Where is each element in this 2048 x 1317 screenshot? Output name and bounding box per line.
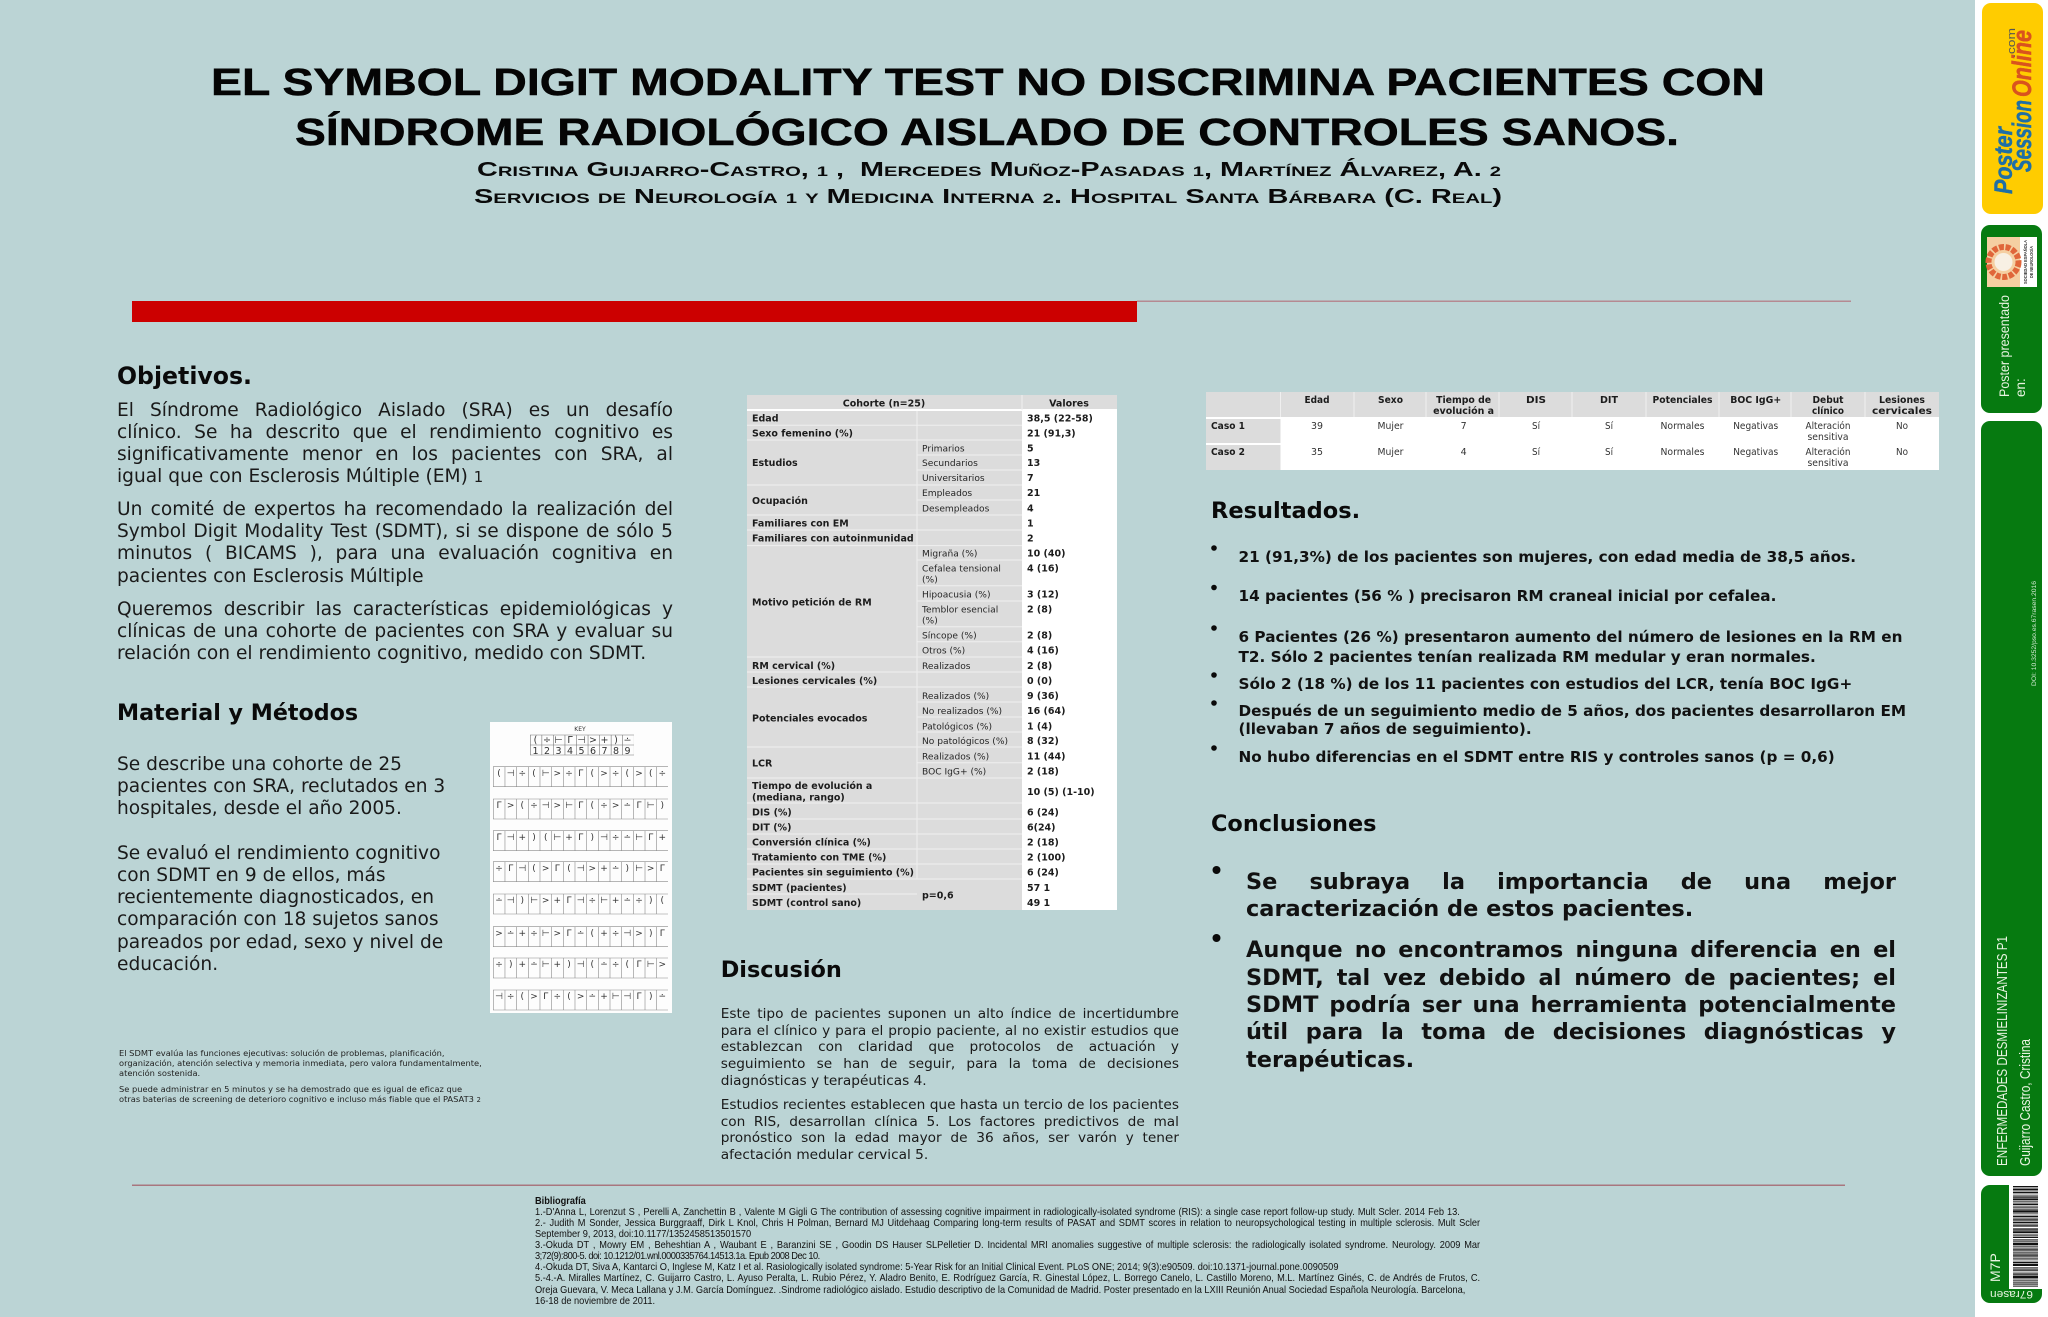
text block: resultados: No hubo diferencias en el SDMT entre RIS y controles sanos (p = 0,6) bbox=[1238, 748, 1835, 766]
table: case series: Negativas bbox=[1733, 421, 1778, 432]
table: cohort characteristics: 3 (12) bbox=[1027, 589, 1059, 600]
sidebar: poster code and barcode bbox=[1981, 1185, 2043, 1303]
authors and affiliations bbox=[474, 158, 1502, 208]
text block: resultados: T2. Sólo 2 pacientes tenían realizada RM medular y eran normales. bbox=[1238, 648, 1816, 666]
text block: discusión: afectación medular cervical 5. bbox=[721, 1147, 928, 1163]
table: case series: Potenciales bbox=[1652, 395, 1713, 406]
text block: SDMT footnote: otras baterias de screening de deterioro cognitivo e incluso más fiable que el PASAT3 2 bbox=[119, 1094, 481, 1104]
text block: bibliografía: 3;72(9):800-5. doi: 10.1212/01.wnl.0000335764.14513.1a. Epub 2008 Dec 10. bbox=[535, 1250, 820, 1262]
text block: conclusiones: Aunque no encontramos ninguna diferencia en el bbox=[1246, 937, 1896, 963]
table: case series: No bbox=[1896, 421, 1908, 432]
table: case series: Mujer bbox=[1378, 447, 1404, 458]
footer rule bbox=[132, 1184, 1845, 1186]
sidebar: session and author: ENFERMEDADES DESMIELINIZANTES P1 bbox=[1994, 936, 2011, 1166]
sidebar: PosterSessionOnline logo: .com bbox=[2006, 28, 2018, 58]
table: case series: 4 bbox=[1461, 447, 1467, 458]
text block: conclusiones: útil para la toma de decisiones diagnósticas y bbox=[1246, 1019, 1896, 1045]
sidebar: session and author bbox=[1981, 421, 2042, 1176]
bullets: results bbox=[1211, 545, 1217, 751]
figure: SDMT test sheet: ÷Γ⊣(>Γ(⊣>+∸)⊢>Γ bbox=[495, 864, 665, 874]
sidebar: poster presented at: DE NEUROLOGÍA bbox=[2027, 245, 2034, 278]
text block: discusión: con RIS, desarrollan clínica 5. Los factores predictivos de mal bbox=[721, 1114, 1179, 1130]
table: cohort characteristics: (%) bbox=[922, 576, 938, 586]
table: cohort characteristics: 7 bbox=[1027, 473, 1034, 484]
table: case series: Debut bbox=[1812, 395, 1844, 406]
table: cohort characteristics: Primarios bbox=[922, 444, 965, 454]
table: cohort characteristics: 2 (8) bbox=[1027, 604, 1052, 615]
text block: objetivos: El Síndrome Radiológico Aislado (SRA) es un desafío bbox=[117, 400, 673, 421]
table: cohort characteristics: Valores bbox=[1049, 399, 1089, 410]
text block: conclusiones: Se subraya la importancia de una mejor bbox=[1246, 869, 1896, 895]
table: cohort characteristics: No patológicos (%) bbox=[922, 736, 1008, 747]
table: cohort characteristics: Desempleados bbox=[922, 504, 990, 514]
sidebar: PosterSessionOnline logo bbox=[1982, 3, 2043, 214]
text block: conclusiones: SDMT podría ser una herramienta potencialmente bbox=[1246, 992, 1896, 1018]
text block: resultados: Sólo 2 (18 %) de los 11 pacientes con estudios del LCR, tenía BOC IgG+ bbox=[1238, 675, 1852, 693]
text block: bibliografía: 2.- Judith M Sonder, Jessica Burggraaff, Dirk L Knol, Chris H Polman, Bernard MJ Uitdehaag Comparing long-term results of PASAT and SDMT scores in relation to neuropsychological testing in multiple sclerosis. Mult Scler bbox=[535, 1217, 1480, 1229]
text block: objetivos: Queremos describir las características epidemiológicas y bbox=[117, 599, 673, 620]
table: case series: BOC IgG+ bbox=[1730, 395, 1781, 406]
figure: SDMT test sheet: ÷)+∸⊢+)⊣(∸÷(Γ⊢> bbox=[495, 960, 666, 970]
table: cohort characteristics: Estudios bbox=[752, 458, 798, 469]
table: cohort characteristics: Conversión clínica (%) bbox=[752, 838, 871, 849]
text block: bibliografía: 4.-Okuda DT, Siva A, Kantarci O, Inglese M, Katz I et al. Rasiologically isolated syndrome: 5-Year Risk for an Initial Clinical Event. PLoS ONE; 2014; 9(3):e90509. doi:10.1371-journal.pone.0090509 bbox=[535, 1261, 1338, 1273]
table: cohort characteristics: 2 bbox=[1027, 533, 1034, 544]
table: cohort characteristics: 16 (64) bbox=[1027, 706, 1065, 717]
text block: objetivos: significativamente menor en los pacientes con SRA, al bbox=[117, 444, 673, 465]
table: cohort characteristics: 6 (24) bbox=[1027, 808, 1059, 819]
text block: discusión: seguimiento se han de seguir, para la toma de decisiones bbox=[721, 1056, 1179, 1072]
table: case series: 35 bbox=[1311, 447, 1323, 458]
table: cohort characteristics: No realizados (%) bbox=[922, 707, 1002, 717]
table: cohort characteristics: DIT (%) bbox=[752, 823, 791, 834]
table: case series: 7 bbox=[1461, 421, 1467, 432]
text block: bibliografía: 5.-4.-A. Miralles Martínez, C. Guijarro Castro, L. Ayuso Peralta, L. Rubio Pérez, Y. Aladro Benito, E. Rodríguez García, R. Ginestal López, L. Borrego Canelo, L. Castillo Moreno, M.L. Martínez Ginés, C. de Andrés de Frutos, C. bbox=[535, 1272, 1480, 1284]
text block: objetivos: minutos ( BICAMS ), para una evaluación cognitiva en bbox=[117, 543, 673, 564]
text block: SDMT footnote: Se puede administrar en 5 minutos y se ha demostrado que es igual de eficaz que bbox=[119, 1084, 462, 1094]
sidebar: poster presented at: SOCIEDAD ESPAÑOLA bbox=[2022, 239, 2028, 284]
text block: objetivos: clínicas de una cohorte de pacientes con SRA y evaluar su bbox=[117, 621, 673, 642]
figure: SDMT test sheet: >∸+÷⊢>Γ∸(+÷⊣>)Γ bbox=[495, 929, 665, 939]
table: cohort characteristics: Motivo petición de RM bbox=[752, 597, 872, 608]
table: case series: Sí bbox=[1605, 447, 1613, 458]
sidebar: session and author: DOI: 10.3252/pso.es.67rasen.2016 bbox=[2031, 581, 2038, 686]
title: EL SYMBOL DIGIT MODALITY TEST NO DISCRIMINA PACIENTES CON bbox=[211, 62, 1765, 104]
heading: Resultados: Resultados. bbox=[1211, 498, 1360, 524]
text block: SDMT footnote: organización, atención selectiva y memoria inmediata, pero valora fundamentalmente, bbox=[119, 1058, 482, 1068]
table: cohort characteristics: Universitarios bbox=[922, 474, 985, 484]
heading: Material y Métodos: Material y Métodos bbox=[117, 700, 358, 726]
text block: conclusiones: caracterización de estos pacientes. bbox=[1246, 896, 1693, 922]
table: cohort characteristics: Potenciales evocados bbox=[752, 713, 868, 724]
table: case series bbox=[1206, 392, 1939, 470]
table: case series: Alteración bbox=[1806, 447, 1850, 458]
table: case series: sensitiva bbox=[1808, 458, 1848, 469]
table: cohort characteristics: 9 (36) bbox=[1027, 691, 1059, 702]
table: cohort characteristics: 13 bbox=[1027, 458, 1040, 469]
table: cohort characteristics: 38,5 (22-58) bbox=[1027, 413, 1093, 424]
table: cohort characteristics: Hipoacusia (%) bbox=[922, 590, 991, 600]
table: cohort characteristics: (mediana, rango) bbox=[752, 793, 845, 804]
table: cohort characteristics: Migraña (%) bbox=[922, 550, 977, 560]
table: cohort characteristics: Familiares con autoinmunidad bbox=[752, 533, 914, 544]
text block: métodos: educación. bbox=[117, 954, 218, 975]
table: case series: Normales bbox=[1660, 447, 1705, 458]
text block: resultados: (llevaban 7 años de seguimiento). bbox=[1238, 720, 1532, 738]
table: cohort characteristics: 21 (91,3) bbox=[1027, 429, 1076, 440]
text block: resultados: 14 pacientes (56 % ) precisaron RM craneal inicial por cefalea. bbox=[1238, 587, 1776, 605]
table: case series: Caso 2 bbox=[1211, 447, 1245, 458]
table: cohort characteristics: 4 bbox=[1027, 503, 1034, 514]
sidebar: PosterSessionOnline logo: Session bbox=[2007, 100, 2037, 172]
text block: métodos: con SDMT en 9 de ellos, más bbox=[117, 865, 386, 886]
table: cohort characteristics: Realizados bbox=[922, 662, 971, 672]
table: cohort characteristics: (%) bbox=[922, 616, 938, 626]
text block: discusión bbox=[721, 1006, 1179, 1163]
sidebar: poster code and barcode: 67rasen bbox=[1990, 1288, 2033, 1300]
text block: bibliografía bbox=[535, 1195, 1480, 1307]
table: cohort characteristics: 4 (16) bbox=[1027, 645, 1059, 656]
text block: objetivos: clínico. Se ha descrito que el rendimiento cognitivo es bbox=[117, 422, 673, 443]
table: cohort characteristics: Secundarios bbox=[922, 459, 978, 469]
table: cohort characteristics: Realizados (%) bbox=[922, 752, 989, 762]
table: cohort characteristics: Lesiones cervicales (%) bbox=[752, 676, 877, 687]
figure: SDMT test sheet: ⊣÷(>Γ÷(>∸+⊢⊣Γ)∸ bbox=[495, 992, 666, 1002]
text block: resultados bbox=[1238, 548, 1906, 766]
table: case series: sensitiva bbox=[1808, 432, 1848, 443]
table: cohort characteristics: 8 (32) bbox=[1027, 736, 1059, 747]
table: cohort characteristics: Cefalea tensional bbox=[922, 565, 1001, 575]
table: cohort characteristics: 4 (16) bbox=[1027, 564, 1059, 575]
table: case series: clínico bbox=[1812, 405, 1844, 417]
table: cohort characteristics: Realizados (%) bbox=[922, 692, 989, 702]
text block: resultados: Después de un seguimiento medio de 5 años, dos pacientes desarrollaron EM bbox=[1238, 702, 1906, 720]
text block: conclusiones: terapéuticas. bbox=[1246, 1047, 1414, 1073]
sidebar: PosterSessionOnline logo: Online bbox=[2007, 30, 2037, 97]
text block: métodos: hospitales, desde el año 2005. bbox=[117, 798, 402, 819]
sidebar: session and author: Guijarro Castro, Cristina bbox=[2017, 1038, 2034, 1166]
table: cohort characteristics: BOC IgG+ (%) bbox=[922, 767, 986, 777]
table: cohort characteristics: 6(24) bbox=[1027, 823, 1056, 834]
table: cohort characteristics: 0 (0) bbox=[1027, 676, 1052, 687]
figure: SDMT test sheet: 123456789 bbox=[532, 746, 631, 757]
heading: Objetivos: Objetivos. bbox=[117, 362, 252, 390]
table: cohort characteristics: 5 bbox=[1027, 443, 1034, 454]
bullets: conclusions bbox=[1212, 866, 1220, 942]
text block: SDMT footnote: El SDMT evalúa las funciones ejecutivas: solución de problemas, planificación, bbox=[119, 1048, 445, 1058]
table: cohort characteristics: Sexo femenino (%) bbox=[752, 429, 853, 440]
sidebar: PosterSessionOnline logo: Poster bbox=[1990, 126, 2018, 194]
text block: bibliografía: Bibliografía bbox=[535, 1195, 586, 1207]
table: case series: cervicales bbox=[1872, 406, 1932, 417]
text block: métodos: pareados por edad, sexo y nivel de bbox=[117, 932, 443, 953]
text block: métodos: Se describe una cohorte de 25 bbox=[117, 754, 402, 775]
table: case series: 39 bbox=[1311, 421, 1323, 432]
table: cohort characteristics: Familiares con EM bbox=[752, 519, 849, 530]
text block: bibliografía: 3.-Okuda DT , Mowry EM , Beheshtian A , Waubant E , Baranzini SE , Goodin DS Hauser SLPelletier D. Incidental MRI anomalies suggestive of multiple sclerosis: the radiologically isolated syndrome. Neurology. 2009 Mar bbox=[535, 1239, 1480, 1251]
sidebar: poster presented at: Poster presentado bbox=[1997, 295, 2012, 397]
table: cohort characteristics: 10 (5) (1-10) bbox=[1027, 787, 1095, 798]
text block: discusión: establezcan con claridad que protocolos de actuación y bbox=[721, 1039, 1179, 1055]
table: cohort characteristics: 57 1 bbox=[1027, 883, 1050, 894]
text block: bibliografía: September 9, 2013, doi:10.1177/1352458513501570 bbox=[535, 1228, 751, 1240]
table: case series: Sí bbox=[1532, 421, 1540, 432]
table: cohort characteristics: 10 (40) bbox=[1027, 549, 1065, 560]
text block: SDMT footnote bbox=[119, 1048, 482, 1104]
table: cohort characteristics: Patológicos (%) bbox=[922, 721, 992, 732]
text block: SDMT footnote: atención sostenida. bbox=[119, 1068, 200, 1078]
text block: resultados: 21 (91,3%) de los pacientes son mujeres, con edad media de 38,5 años. bbox=[1238, 548, 1856, 566]
table: cohort characteristics: Tiempo de evolución a bbox=[752, 781, 872, 792]
table: case series: Normales bbox=[1660, 421, 1705, 432]
table: cohort characteristics: LCR bbox=[752, 759, 773, 770]
text block: discusión: Este tipo de pacientes suponen un alto índice de incertidumbre bbox=[721, 1006, 1179, 1022]
table: cohort characteristics: 2 (100) bbox=[1027, 853, 1065, 864]
text block: objetivos: Symbol Digit Modality Test (SDMT), si se dispone de sólo 5 bbox=[117, 521, 673, 542]
table: cohort characteristics: Ocupación bbox=[752, 496, 808, 507]
text block: objetivos: relación con el rendimiento cognitivo, medido con SDMT. bbox=[117, 643, 646, 664]
title bbox=[211, 62, 1765, 154]
text block: discusión: diagnósticas y terapéuticas 4. bbox=[721, 1073, 927, 1089]
table: case series: No bbox=[1896, 447, 1908, 458]
figure: SDMT test sheet bbox=[490, 722, 672, 1013]
heading: Discusión: Discusión bbox=[721, 957, 842, 983]
text block: bibliografía: 16-18 de noviembre de 2011. bbox=[535, 1295, 655, 1307]
table: case series: Lesiones bbox=[1879, 395, 1925, 406]
text block: métodos: pacientes con SRA, reclutados en 3 bbox=[117, 776, 445, 797]
table: case series: Sí bbox=[1605, 421, 1613, 432]
text block: objetivos bbox=[117, 400, 673, 664]
text block: métodos: comparación con 18 sujetos sanos bbox=[117, 909, 439, 930]
text block: objetivos: Un comité de expertos ha recomendado la realización del bbox=[117, 499, 673, 520]
table: case series: Edad bbox=[1304, 395, 1330, 406]
table: cohort characteristics: Pacientes sin seguimiento (%) bbox=[752, 868, 914, 879]
text block: conclusiones bbox=[1246, 869, 1896, 1073]
table: cohort characteristics: DIS (%) bbox=[752, 808, 792, 819]
text block: resultados: 6 Pacientes (26 %) presentaron aumento del número de lesiones en la RM en bbox=[1238, 628, 1902, 646]
sidebar: poster presented at: en: bbox=[2013, 378, 2028, 397]
text block: bibliografía: 1.-D'Anna L, Lorenzut S , Perelli A, Zanchettin B , Valente M Gigli G The contribution of assessing cognitive impairment in radiologically-isolated syndrome (RIS): a single case report follow-up study. Mult Scler. 2014 Feb 13. bbox=[535, 1206, 1460, 1218]
table: cohort characteristics: 21 bbox=[1027, 488, 1040, 499]
table: case series: Negativas bbox=[1733, 447, 1778, 458]
table: cohort characteristics: 2 (18) bbox=[1027, 838, 1059, 849]
table: cohort characteristics: Edad bbox=[752, 413, 779, 424]
figure: SDMT test sheet: KEY bbox=[574, 726, 586, 733]
table: cohort characteristics: Tratamiento con TME (%) bbox=[752, 853, 886, 864]
table: case series: evolución a bbox=[1433, 405, 1494, 417]
table: cohort characteristics: 2 (18) bbox=[1027, 766, 1059, 777]
table: case series: Caso 1 bbox=[1211, 421, 1245, 432]
text block: bibliografía: Oreja Guevara, V. Meca Lallana y J.M. García Domínguez. .Sindrome radiológico aislado. Estudio descriptivo de la Comunidad de Madrid. Poster presentado en la LXIII Reunión Anual Sociedad Española Neurología. Barcelona, bbox=[535, 1284, 1465, 1296]
table: cohort characteristics: Empleados bbox=[922, 489, 972, 499]
table: cohort characteristics: Otros (%) bbox=[922, 646, 965, 656]
text block: discusión: para el clínico y para el propio paciente, al no existir estudios que bbox=[721, 1023, 1179, 1039]
text block: discusión: pronóstico son la edad mayor de 36 años, ser varón y tener bbox=[721, 1130, 1179, 1146]
text block: métodos bbox=[117, 754, 445, 975]
header rule: red bar bbox=[132, 300, 1851, 322]
table: cohort characteristics: Cohorte (n=25) bbox=[843, 399, 925, 410]
table: cohort characteristics: 2 (8) bbox=[1027, 631, 1052, 642]
table: cohort characteristics bbox=[747, 395, 1117, 910]
heading: Conclusiones: Conclusiones bbox=[1211, 811, 1376, 837]
table: case series: Alteración bbox=[1806, 421, 1850, 432]
sidebar: poster presented at bbox=[1981, 225, 2042, 413]
table: cohort characteristics: 49 1 bbox=[1027, 898, 1050, 909]
table: cohort characteristics: Temblor esencial bbox=[921, 605, 998, 615]
text block: objetivos: pacientes con Esclerosis Múltiple bbox=[117, 566, 424, 587]
table: cohort characteristics: 2 (8) bbox=[1027, 661, 1052, 672]
text block: métodos: recientemente diagnosticados, en bbox=[117, 887, 434, 908]
figure: SDMT test sheet: ∸⊣)⊢>+Γ⊣÷⊢+∸÷)( bbox=[495, 896, 664, 906]
title: SÍNDROME RADIOLÓGICO AISLADO DE CONTROLES SANOS. bbox=[295, 110, 1679, 154]
table: cohort characteristics: 11 (44) bbox=[1027, 751, 1065, 762]
table: cohort characteristics: 1 bbox=[1027, 519, 1034, 530]
figure: SDMT test sheet: Γ⊣+)(⊢+Γ)⊣÷∸⊢Γ+ bbox=[496, 833, 666, 843]
text block: métodos: Se evaluó el rendimiento cognitivo bbox=[117, 843, 440, 864]
table: case series: DIT bbox=[1600, 395, 1618, 406]
table: case series: Tiempo de bbox=[1436, 395, 1491, 406]
table: cohort characteristics: RM cervical (%) bbox=[752, 661, 835, 672]
figure: SDMT test sheet: (÷⊢Γ⊣>+)∸ bbox=[534, 735, 631, 746]
table: cohort characteristics: p=0,6 bbox=[922, 890, 954, 901]
table: cohort characteristics: 1 (4) bbox=[1027, 721, 1052, 732]
table: case series: Mujer bbox=[1378, 421, 1404, 432]
text block: objetivos: igual que con Esclerosis Múltiple (EM) 1 bbox=[117, 466, 483, 487]
text block: discusión: Estudios recientes establecen que hasta un tercio de los pacientes bbox=[721, 1097, 1179, 1113]
text block: conclusiones: SDMT, tal vez debido al número de pacientes; el bbox=[1246, 965, 1896, 991]
authors and affiliations: Servicios de Neurología 1 y Medicina Interna 2. Hospital Santa Bárbara (C. Real) bbox=[474, 186, 1502, 208]
table: case series: Sexo bbox=[1378, 395, 1403, 406]
sidebar: poster code and barcode: M7P bbox=[1987, 1253, 2003, 1282]
table: case series: DIS bbox=[1526, 395, 1546, 406]
table: cohort characteristics: 6 (24) bbox=[1027, 868, 1059, 879]
table: cohort characteristics: Síncope (%) bbox=[922, 632, 977, 642]
authors and affiliations: Cristina Guijarro-Castro, 1 , Mercedes Muñoz-Pasadas 1, Martínez Álvarez, A. 2 bbox=[477, 158, 1501, 181]
table: cohort characteristics: SDMT (pacientes) bbox=[752, 883, 847, 894]
figure: SDMT test sheet: Γ>(÷⊣>⊢Γ(÷>∸Γ⊢) bbox=[496, 801, 664, 811]
figure: SDMT test sheet: (⊣÷(⊢>÷Γ(>÷(>(÷ bbox=[497, 769, 666, 779]
table: case series: Sí bbox=[1532, 447, 1540, 458]
table: cohort characteristics: SDMT (control sano) bbox=[752, 898, 861, 909]
